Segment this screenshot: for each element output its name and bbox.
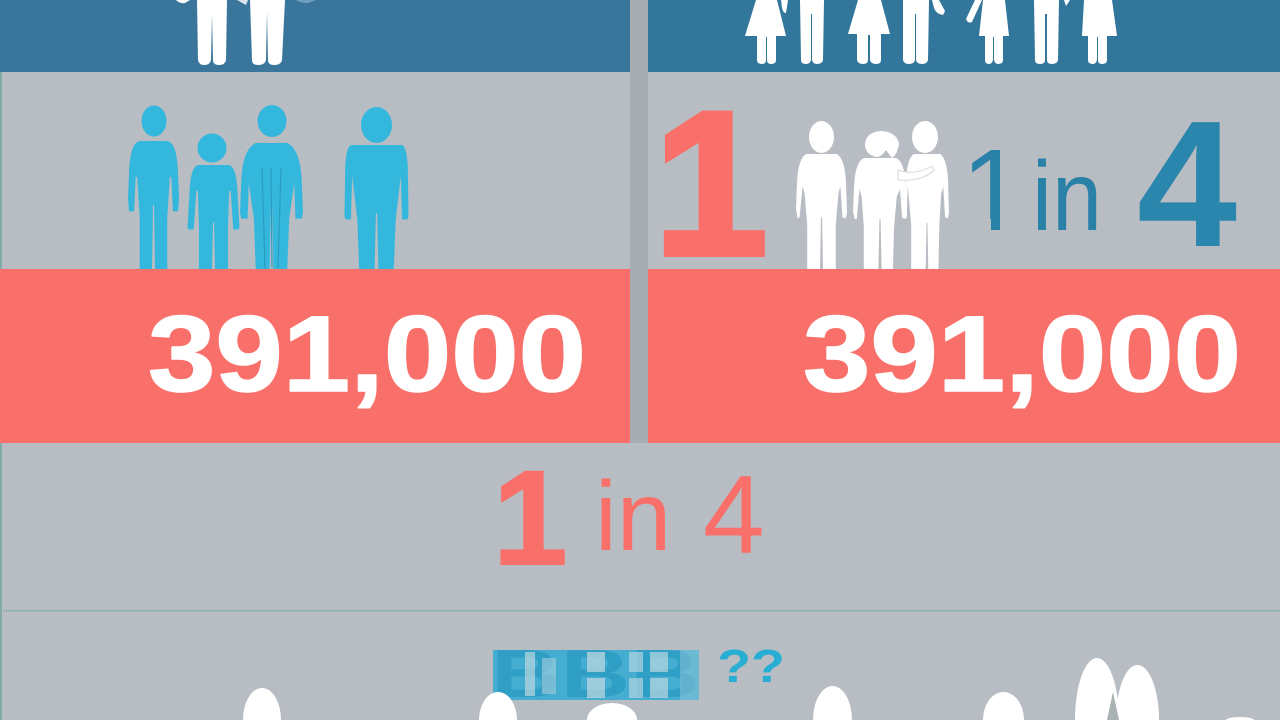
icon: arm across shoulder [898, 166, 934, 180]
panel: top right header band [648, 0, 1280, 72]
icon: white head shapes along bottom edge [243, 658, 1254, 720]
text: garbled blue heading [491, 636, 785, 712]
icon: blue person four [344, 107, 408, 269]
icon: blue person two [188, 134, 240, 269]
icon: white person left [796, 121, 847, 269]
text: 1 in 4 blue: 1 [961, 125, 1026, 255]
icon: white couple figures [176, 0, 316, 65]
number: 391,000 left: 391,000 [148, 293, 586, 414]
icon: blue person one [128, 106, 179, 269]
icon: row of white family figures [745, 0, 1117, 64]
text: 1 in 4 coral: 1 [493, 444, 568, 593]
icon: white person centre [853, 131, 907, 269]
text: 1 in 4 blue: in [1032, 141, 1102, 251]
text: garbled blue heading: ?? [717, 640, 785, 692]
icon: white person right [905, 121, 949, 269]
icon: three white people with arm around shoulder [796, 121, 949, 269]
text: 1 in 4 blue [972, 122, 1236, 246]
panel: top left header band [0, 0, 630, 72]
text: 1 in 4 coral: in [595, 461, 671, 571]
number: 391,000 right: 391,000 [803, 293, 1241, 414]
text: 1 in 4 blue: 4 [1137, 84, 1237, 285]
text: 1 in 4 coral [493, 444, 765, 593]
icon: blue person three [240, 105, 303, 269]
panel: coral band left [0, 269, 630, 443]
icon: four blue standing people [128, 105, 408, 269]
big coral numeral 1: 1 [654, 70, 767, 298]
panel: coral band right [648, 269, 1280, 443]
text: garbled blue heading: BBB [491, 636, 700, 712]
text: 1 in 4 coral: 4 [703, 453, 765, 577]
